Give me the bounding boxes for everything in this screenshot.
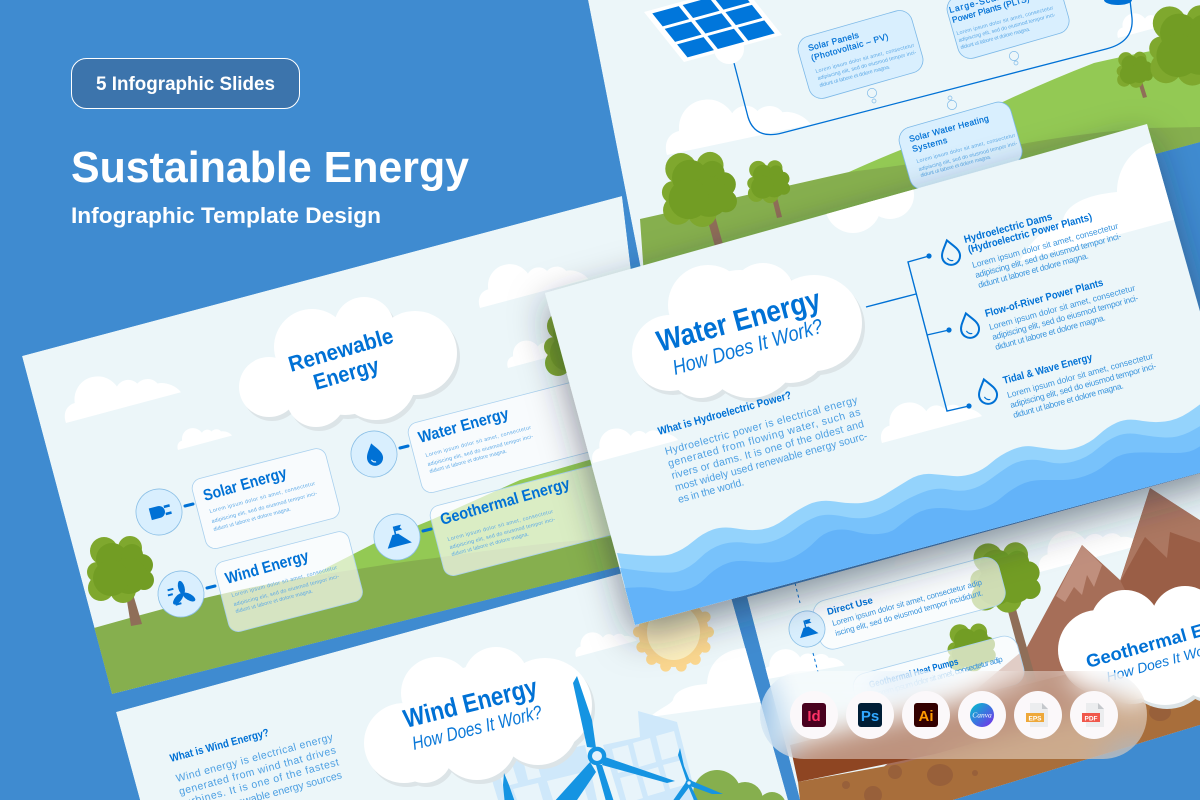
item: hydroelectric dams: (Hydroelectric Power Plants) <box>967 211 1093 256</box>
connector: branching tree <box>866 253 972 411</box>
icon: mountain flag in circle <box>374 514 420 560</box>
text block: what is hydroelectric power <box>657 389 869 506</box>
mountain: big <box>960 488 1200 760</box>
connector: wind <box>207 586 215 588</box>
card: wind energy: Wind Energy <box>223 548 311 588</box>
heading: renewable energy: Renewable <box>285 323 396 377</box>
card: geothermal energy: Geothermal Energy <box>438 476 572 529</box>
cloud: low left <box>757 639 845 680</box>
panel: renewable energy slide <box>22 196 665 694</box>
ground: dark green <box>94 533 660 694</box>
panel: geothermal energy slide <box>747 473 1200 800</box>
icon: plug in circle <box>136 488 182 536</box>
cloud: renewable energy title <box>239 297 460 431</box>
card: geothermal energy: didunt ut labore et dolore magna. <box>451 531 530 558</box>
icon: mountain flag in circle <box>785 607 829 651</box>
item: hydroelectric dams <box>963 211 1122 290</box>
item: tidal and wave energy: Lorem ipsum dolor sit amet, consectetur <box>1006 351 1154 400</box>
mountain: small <box>880 545 1190 770</box>
text block: what is hydroelectric power: What is Hydroelectric Power? <box>657 389 793 438</box>
card: water energy: didunt ut labore et dolore magna. <box>429 448 508 475</box>
badge: 5 infographic slides <box>72 58 300 108</box>
soil: dark upper layer <box>790 640 1200 782</box>
card: solar panels <box>795 7 926 103</box>
subheading: how does it work: How Does It Work? <box>410 702 545 755</box>
icon: drop 2 <box>957 311 981 340</box>
item: tidal and wave energy: adipiscing elit, sed do eiusmod tempor inci- <box>1009 361 1157 410</box>
card: solar water heating systems: Solar Water Heating <box>908 113 990 144</box>
item: tidal and wave energy: Tidal & Wave Energy <box>1002 351 1094 387</box>
connector: geothermal <box>423 529 431 531</box>
cloud: wind energy title <box>364 647 595 787</box>
cloud: geothermal title <box>1058 586 1200 709</box>
cloud: top centre <box>571 621 637 657</box>
connector: dashed line <box>795 583 818 672</box>
card: water energy: Water Energy <box>417 406 511 447</box>
hill: light green <box>849 51 1200 172</box>
card: solar water heating systems: didunt ut labore et dolore magna. <box>920 154 992 179</box>
card: heat pumps <box>850 633 1027 725</box>
icon: PDF file: PDF <box>1084 716 1098 722</box>
card: direct use: Lorem ipsum dolor sit amet, consectetur adip <box>831 578 983 628</box>
card: direct use <box>810 554 1008 652</box>
panel: water energy slide <box>545 124 1200 625</box>
text block: what is wind energy: Wind energy is electrical energy <box>175 731 335 785</box>
cloud: lower left <box>666 100 810 155</box>
item: tidal and wave energy: didunt ut labore et dolore magna. <box>1012 380 1125 420</box>
wave: deep blue <box>625 430 1200 625</box>
item: hydroelectric dams: Hydroelectric Dams <box>963 211 1054 246</box>
wave: light blue <box>617 385 1200 625</box>
tree: left <box>87 536 154 626</box>
tree: large <box>970 542 1041 682</box>
icon: Canva <box>958 691 1006 739</box>
soil: brown lower layer <box>798 680 1200 800</box>
cloud: sky left large <box>64 376 180 423</box>
card: geothermal energy: adipiscing elit, sed do eiusmod tempor inci- <box>449 517 556 551</box>
cloud: lower left <box>586 413 678 463</box>
text block: what is hydroelectric power: rivers or dams. It is one of the oldest and <box>670 418 865 482</box>
icon: Illustrator: Ai <box>918 708 934 725</box>
turbine: small <box>672 748 723 800</box>
title: sustainable energy: Sustainable Energy <box>71 143 470 192</box>
card: direct use: Direct Use <box>826 595 874 618</box>
item: tidal and wave energy <box>1002 351 1157 420</box>
card: water energy: Lorem ipsum dolor sit amet, consectetur <box>425 425 532 459</box>
cloud: lower centre <box>873 385 982 443</box>
heading: renewable energy <box>288 330 394 390</box>
card: large-scale solar power plants: didunt ut labore et dolore magna. <box>960 27 1031 51</box>
turbine: partial left <box>503 773 516 800</box>
card: water energy: adipiscing elit, sed do eiusmod tempor inci- <box>427 434 534 468</box>
card: solar panels: didunt ut labore et dolore magna. <box>819 64 891 89</box>
turbine: main <box>553 676 675 800</box>
panel: wind energy slide <box>116 574 788 800</box>
tree: small <box>948 624 996 672</box>
connector: solar <box>185 504 193 506</box>
badge: 5 infographic slides: 5 Infographic Slides <box>96 74 275 95</box>
connector: water <box>400 446 408 448</box>
card: solar panels: Lorem ipsum dolor sit amet, consectetur <box>815 43 915 75</box>
card: geothermal energy <box>430 465 611 576</box>
card: heat pumps: Geothermal Heat Pumps <box>868 656 960 691</box>
connector: solar path <box>734 0 1132 135</box>
subheading: how does it work: How Does It Work? <box>670 315 826 380</box>
icon: Canva: Canva <box>972 710 992 720</box>
item: flow-of-river power plants: Lorem ipsum dolor sit amet, consectetur <box>988 283 1136 332</box>
cloud: top right large <box>1020 130 1195 261</box>
text block: what is hydroelectric power: es in the world. <box>677 476 745 506</box>
item: hydroelectric dams: adipiscing elit, sed do eiusmod tempor inci- <box>974 231 1122 280</box>
item: hydroelectric dams: didunt ut labore et dolore magna. <box>977 250 1090 290</box>
ground: dark green <box>640 127 1200 266</box>
card: heat pumps: Lorem ipsum dolor sit amet, consectetur adip <box>873 655 1004 699</box>
icon: EPS file: EPS <box>1028 716 1042 722</box>
cloud: mountain left <box>1031 513 1141 572</box>
tree: small right <box>1117 52 1153 98</box>
text block: what is wind energy: What is Wind Energy? <box>169 727 271 765</box>
tree: big right <box>1149 5 1200 86</box>
heading: renewable energy: Energy <box>310 352 382 395</box>
icon: EPS file <box>1014 691 1062 739</box>
panel: software format icons pill <box>760 671 1147 759</box>
card: solar energy <box>190 446 342 551</box>
icon: wind turbine in circle <box>158 570 204 618</box>
item: flow-of-river power plants: Flow-of-River Power Plants <box>984 277 1105 320</box>
card: solar water heating systems: adipiscing elit, sed do eiusmod tempor inci- <box>918 141 1018 173</box>
icon: drop 3 <box>975 377 999 406</box>
heading: wind energy: Wind Energy <box>400 671 541 734</box>
text block: what is hydroelectric power: most widely used renewable energy sourc- <box>674 430 869 494</box>
card: large-scale solar power plants <box>944 0 1072 65</box>
subtitle: infographic template design: Infographic Template Design <box>71 203 381 228</box>
card: solar panels: (Photovoltaic – PV) <box>810 31 890 63</box>
bush: green <box>693 770 786 800</box>
cloud: sky left small <box>178 428 232 450</box>
card: solar water heating systems <box>896 96 1025 193</box>
icon: Illustrator <box>902 691 950 739</box>
card: wind energy: adipiscing elit, sed do eiusmod tempor inci- <box>233 574 340 608</box>
node: top blue dot <box>1104 0 1132 5</box>
cloud: right <box>650 648 775 717</box>
cloud: sky right upper <box>479 264 588 308</box>
card: large-scale solar power plants: Lorem ipsum dolor sit amet, consectetur <box>956 5 1054 37</box>
card: wind energy <box>213 529 365 634</box>
panel: solar energy slide <box>588 0 1200 290</box>
cloud: under water slide <box>891 537 946 567</box>
icon: InDesign <box>790 691 838 739</box>
card: solar water heating systems: Lorem ipsum dolor sit amet, consectetur <box>916 133 1016 165</box>
text block: what is wind energy <box>169 727 343 800</box>
text block: what is hydroelectric power: generated from flowing water, such as <box>667 406 862 470</box>
icon: Photoshop: Ps <box>861 708 879 725</box>
card: solar panels: Solar Panels <box>807 30 860 53</box>
card: solar energy: didunt ut labore et dolore magna. <box>213 506 292 533</box>
icon: sun <box>638 597 708 667</box>
card: geothermal energy: Lorem ipsum dolor sit amet, consectetur <box>447 509 554 543</box>
cloud: water energy title <box>632 263 865 402</box>
card: wind energy: Lorem ipsum dolor sit amet, consectetur <box>231 565 338 599</box>
card: solar water heating systems: Systems <box>911 135 948 154</box>
card: large-scale solar power plants: adipiscing elit, sed do eiusmod tempor inci- <box>958 12 1056 44</box>
card: solar energy: adipiscing elit, sed do eiusmod tempor inci- <box>211 491 318 525</box>
icon: PDF file <box>1070 691 1118 739</box>
card: solar energy: Solar Energy <box>201 465 289 505</box>
icon: InDesign: Id <box>807 708 821 725</box>
heading: water energy: Water Energy <box>653 283 824 359</box>
item: flow-of-river power plants <box>984 277 1139 352</box>
icon: solar panel <box>644 0 782 62</box>
cloud: sky right lower <box>508 340 548 368</box>
card: water energy <box>408 382 588 493</box>
wave: mid blue <box>620 410 1200 625</box>
card: direct use: iscing elit, sed do eiusmod tempor incididunt. <box>834 588 984 638</box>
cloud: upper right <box>1118 14 1154 38</box>
text block: what is wind energy: generated from wind that drives <box>178 744 337 798</box>
buildings <box>488 711 697 800</box>
tree: right partly hidden <box>544 316 566 376</box>
hill: light green <box>314 460 619 590</box>
cloud: behind solar panel <box>715 46 744 64</box>
icon: water drop in circle <box>350 430 398 478</box>
item: hydroelectric dams: Lorem ipsum dolor sit amet, consectetur <box>971 221 1119 270</box>
cloud: top under edge <box>825 171 914 233</box>
item: flow-of-river power plants: adipiscing elit, sed do eiusmod tempor inci- <box>991 293 1139 342</box>
card: wind energy: didunt ut labore et dolore magna. <box>235 588 314 615</box>
item: flow-of-river power plants: didunt ut labore et dolore magna. <box>994 312 1107 352</box>
tree: big left <box>662 152 737 250</box>
icon: drop 1 <box>938 238 962 267</box>
icon: Photoshop <box>846 691 894 739</box>
card: solar energy: Lorem ipsum dolor sit amet, consectetur <box>209 481 316 515</box>
card: solar panels: adipiscing elit, sed do eiusmod tempor inci- <box>817 50 917 82</box>
text block: what is hydroelectric power: Hydroelectric power is electrical energy <box>664 394 860 458</box>
tree: small left <box>747 160 790 218</box>
